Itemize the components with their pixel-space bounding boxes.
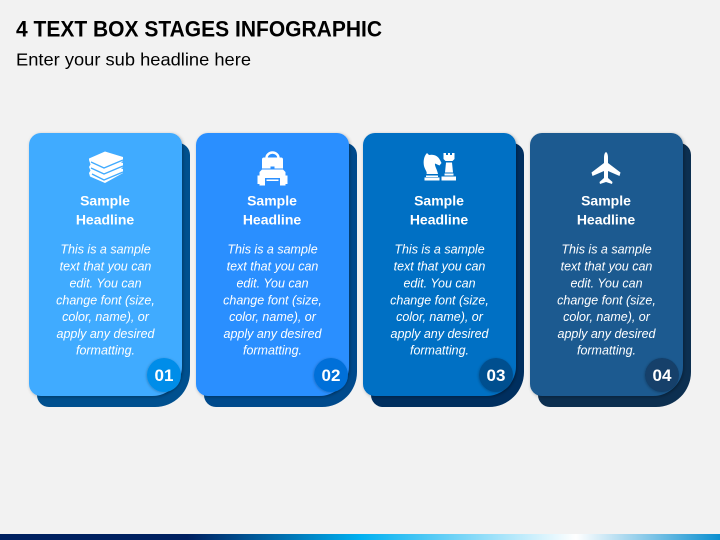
icon: airplane	[592, 152, 620, 184]
body text: formatting.	[76, 344, 135, 358]
icon: backpack	[258, 152, 288, 186]
body text: change font (size,	[557, 294, 656, 308]
card backing	[371, 143, 524, 407]
headline	[243, 192, 301, 228]
headline: Sample	[247, 192, 297, 208]
body text	[223, 242, 323, 358]
body text: color, name), or	[229, 310, 317, 324]
card face	[530, 133, 683, 396]
number badge	[645, 358, 679, 392]
number badge: 01	[155, 366, 173, 385]
number badge: 03	[487, 366, 505, 385]
number badge: 04	[653, 366, 672, 385]
body text: This is a sample	[60, 242, 151, 256]
body text: change font (size,	[390, 294, 489, 308]
body text: formatting.	[243, 344, 302, 358]
icon: books	[89, 152, 123, 183]
title: 4 TEXT BOX STAGES INFOGRAPHIC	[16, 16, 382, 42]
card face	[29, 133, 182, 396]
body text	[557, 242, 657, 358]
body text: This is a sample	[227, 242, 318, 256]
number badge	[479, 358, 513, 392]
panel: stage 3	[363, 133, 524, 407]
body text	[56, 242, 156, 358]
icon: chess pieces	[424, 153, 456, 180]
headline: Headline	[410, 212, 468, 228]
subtitle: Enter your sub headline here	[16, 50, 251, 70]
body text: apply any desired	[57, 327, 156, 341]
panel: stage 2	[196, 133, 357, 407]
headline: Headline	[76, 212, 134, 228]
body text: change font (size,	[56, 294, 155, 308]
panel: stage 1	[29, 133, 190, 407]
headline	[76, 192, 134, 228]
body text: text that you can	[227, 260, 318, 274]
body text: apply any desired	[558, 327, 657, 341]
body text: text that you can	[394, 260, 485, 274]
body text: color, name), or	[396, 310, 484, 324]
card backing	[37, 143, 190, 407]
body text	[390, 242, 490, 358]
body text: apply any desired	[224, 327, 323, 341]
body text: edit. You can	[403, 276, 476, 290]
body text: This is a sample	[394, 242, 485, 256]
headline: Sample	[581, 192, 631, 208]
footer gradient bar	[0, 534, 720, 540]
body text: formatting.	[410, 344, 469, 358]
headline: Sample	[414, 192, 464, 208]
body text: color, name), or	[62, 310, 150, 324]
body text: text that you can	[561, 260, 652, 274]
body text: apply any desired	[391, 327, 490, 341]
body text: formatting.	[577, 344, 636, 358]
headline: Headline	[577, 212, 635, 228]
headline: Sample	[80, 192, 130, 208]
body text: edit. You can	[69, 276, 142, 290]
headline: Headline	[243, 212, 301, 228]
number badge	[314, 358, 348, 392]
card face	[196, 133, 349, 396]
card backing	[538, 143, 691, 407]
card backing	[204, 143, 357, 407]
body text: edit. You can	[236, 276, 309, 290]
headline	[410, 192, 468, 228]
number badge: 02	[322, 366, 340, 385]
card face	[363, 133, 516, 396]
body text: edit. You can	[570, 276, 643, 290]
body text: change font (size,	[223, 294, 322, 308]
number badge	[147, 358, 181, 392]
body text: This is a sample	[561, 242, 652, 256]
headline	[577, 192, 635, 228]
panel: stage 4	[530, 133, 691, 407]
body text: text that you can	[60, 260, 151, 274]
body text: color, name), or	[563, 310, 651, 324]
